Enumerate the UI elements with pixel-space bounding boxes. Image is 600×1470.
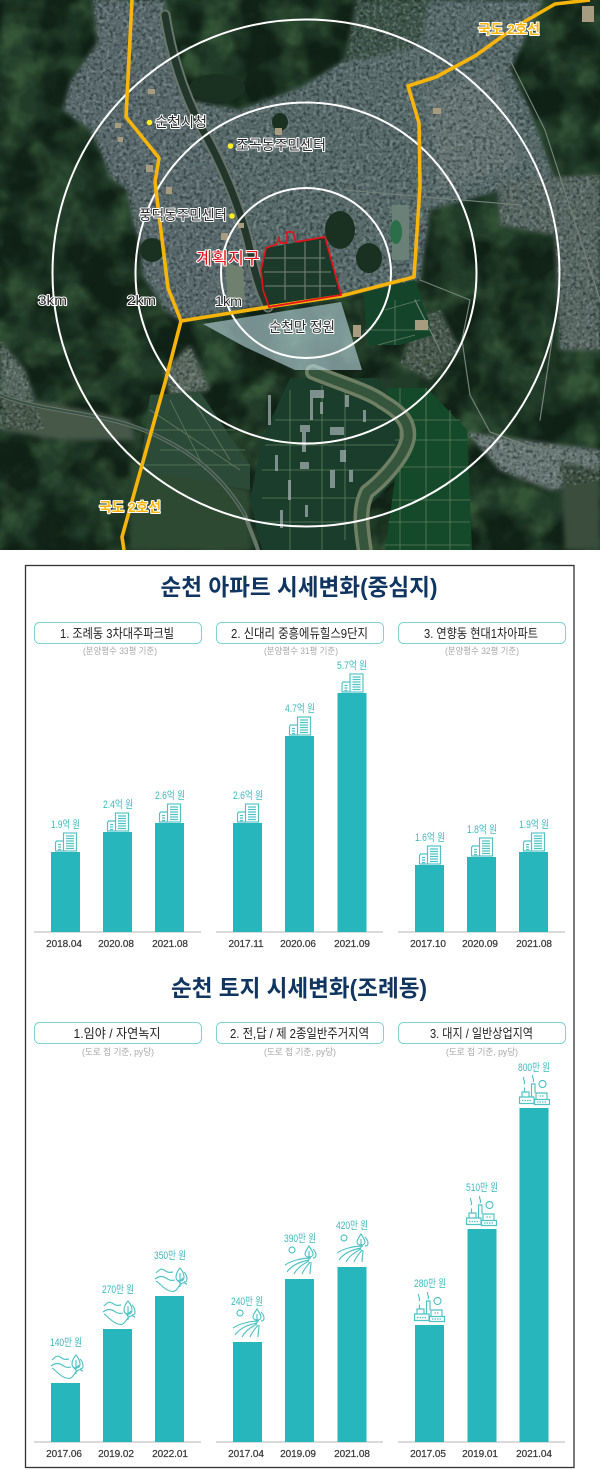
forest patches in the city — [140, 74, 382, 273]
chart: 연향동 현대1차아파트: (분양평수 32평 기준) — [445, 646, 519, 656]
distance circles — [52, 20, 560, 526]
chart: 대지 / 일반상업지역: 2021.04 — [516, 1449, 552, 1460]
map labels: 풍덕동주민센터 — [139, 207, 227, 223]
chart: 대지 / 일반상업지역: 3. 대지 / 일반상업지역 — [430, 1026, 533, 1041]
chart: 조례동 3차대주파크빌: 2020.08 — [98, 939, 134, 950]
chart: 대지 / 일반상업지역: 280만 원 — [414, 1277, 446, 1290]
chart: 연향동 현대1차아파트: 2017.10 — [410, 939, 446, 950]
chart: 전,답 / 제 2종일반주거지역: 420만 원 — [336, 1219, 368, 1232]
map labels: 1km — [215, 293, 242, 309]
road label top: 국도 2호선 — [478, 22, 540, 37]
chart: 전,답 / 제 2종일반주거지역: 390만 원 — [284, 1232, 316, 1245]
chart: 전,답 / 제 2종일반주거지역: 2. 전,답 / 제 2종일반주거지역 — [230, 1026, 369, 1041]
chart: 전,답 / 제 2종일반주거지역 — [216, 1022, 384, 1460]
location dots — [147, 120, 235, 219]
chart: 조례동 3차대주파크빌 — [34, 622, 202, 950]
chart: 전,답 / 제 2종일반주거지역: 2021.08 — [334, 1449, 370, 1460]
chart: 신대리 중흥에듀힐스9단지: 5.7억 원 — [337, 659, 367, 672]
heading: apartment prices: 순천 아파트 시세변화(중심지) — [160, 574, 438, 600]
heading: land prices: 순천 토지 시세변화(조례동) — [171, 975, 427, 1001]
chart: 조례동 3차대주파크빌: 1.9억 원 — [51, 818, 80, 831]
chart: 조례동 3차대주파크빌: (분양평수 33평 기준) — [83, 646, 157, 656]
chart: 신대리 중흥에듀힐스9단지: 2.6억 원 — [233, 789, 263, 802]
map labels: 3km — [38, 292, 67, 308]
chart: 임야 / 자연녹지: 140만 원 — [50, 1336, 82, 1349]
map labels: 순천시청 — [155, 114, 207, 130]
chart: 임야 / 자연녹지: 2019.02 — [98, 1449, 134, 1460]
chart: 조례동 3차대주파크빌: 2018.04 — [46, 939, 82, 950]
chart: 임야 / 자연녹지 — [34, 1022, 202, 1460]
paddies — [140, 280, 472, 550]
plan site fields — [225, 205, 409, 307]
map: aerial site map — [0, 0, 600, 552]
chart: 연향동 현대1차아파트: 3. 연향동 현대1차아파트 — [424, 626, 538, 641]
chart: 조례동 3차대주파크빌: 1. 조례동 3차대주파크빌 — [60, 626, 174, 641]
chart: 신대리 중흥에듀힐스9단지 — [216, 622, 384, 950]
chart: 전,답 / 제 2종일반주거지역: (도로 접 기준, py당) — [264, 1046, 336, 1057]
chart: 신대리 중흥에듀힐스9단지: 2017.11 — [228, 939, 264, 950]
chart: 연향동 현대1차아파트: 1.6억 원 — [415, 831, 445, 844]
map labels: 2km — [127, 292, 156, 308]
road label bottom: 국도 2호선 — [99, 500, 161, 515]
chart: 임야 / 자연녹지: 2022.01 — [152, 1449, 188, 1460]
chart: 임야 / 자연녹지: 270만 원 — [102, 1283, 134, 1296]
sand lots and sports fields — [115, 6, 594, 337]
chart: 연향동 현대1차아파트 — [398, 622, 566, 950]
national road route 2 — [122, 0, 590, 550]
plan site label: 계획지구 — [196, 249, 260, 268]
chart: 조례동 3차대주파크빌: 2.6억 원 — [155, 789, 185, 802]
chart: 임야 / 자연녹지: 1.임야 / 자연녹지 — [74, 1026, 160, 1041]
chart: 대지 / 일반상업지역: (도로 접 기준, py당) — [446, 1046, 518, 1057]
chart: 임야 / 자연녹지: 2017.06 — [46, 1449, 82, 1460]
panel: price charts — [26, 566, 574, 1468]
chart: 조례동 3차대주파크빌: 2021.08 — [152, 939, 188, 950]
chart: 신대리 중흥에듀힐스9단지: 2020.06 — [280, 939, 316, 950]
map labels — [38, 114, 335, 335]
chart: 대지 / 일반상업지역: 800만 원 — [518, 1061, 550, 1074]
chart: 임야 / 자연녹지: 350만 원 — [154, 1249, 186, 1262]
chart: 대지 / 일반상업지역: 2019.01 — [462, 1449, 498, 1460]
chart: 대지 / 일반상업지역 — [398, 1022, 566, 1460]
chart: 신대리 중흥에듀힐스9단지: 2021.09 — [334, 939, 370, 950]
chart: 연향동 현대1차아파트: 1.8억 원 — [467, 823, 497, 836]
chart: 연향동 현대1차아파트: 2021.08 — [516, 939, 552, 950]
순천만 정원 overlay — [203, 302, 362, 370]
chart: 임야 / 자연녹지: (도로 접 기준, py당) — [82, 1046, 154, 1057]
urban texture — [0, 0, 600, 489]
chart: 대지 / 일반상업지역: 510만 원 — [466, 1181, 498, 1194]
map labels: 조곡동주민센터 — [236, 137, 326, 153]
chart: 신대리 중흥에듀힐스9단지: 2. 신대리 중흥에듀힐스9단지 — [231, 626, 368, 641]
chart: 조례동 3차대주파크빌: 2.4억 원 — [103, 798, 133, 811]
chart: 전,답 / 제 2종일반주거지역: 2017.04 — [228, 1449, 264, 1460]
plan site boundary — [261, 232, 341, 307]
rivers — [0, 15, 600, 552]
chart: 신대리 중흥에듀힐스9단지: (분양평수 31평 기준) — [264, 646, 338, 656]
chart: 대지 / 일반상업지역: 2017.05 — [410, 1449, 446, 1460]
chart: 신대리 중흥에듀힐스9단지: 4.7억 원 — [285, 702, 315, 715]
chart: 연향동 현대1차아파트: 1.9억 원 — [519, 818, 549, 831]
chart: 전,답 / 제 2종일반주거지역: 2019.09 — [280, 1449, 316, 1460]
map labels: 순천만 정원 — [269, 319, 335, 335]
chart: 전,답 / 제 2종일반주거지역: 240만 원 — [231, 1295, 263, 1308]
chart: 연향동 현대1차아파트: 2020.09 — [462, 939, 498, 950]
